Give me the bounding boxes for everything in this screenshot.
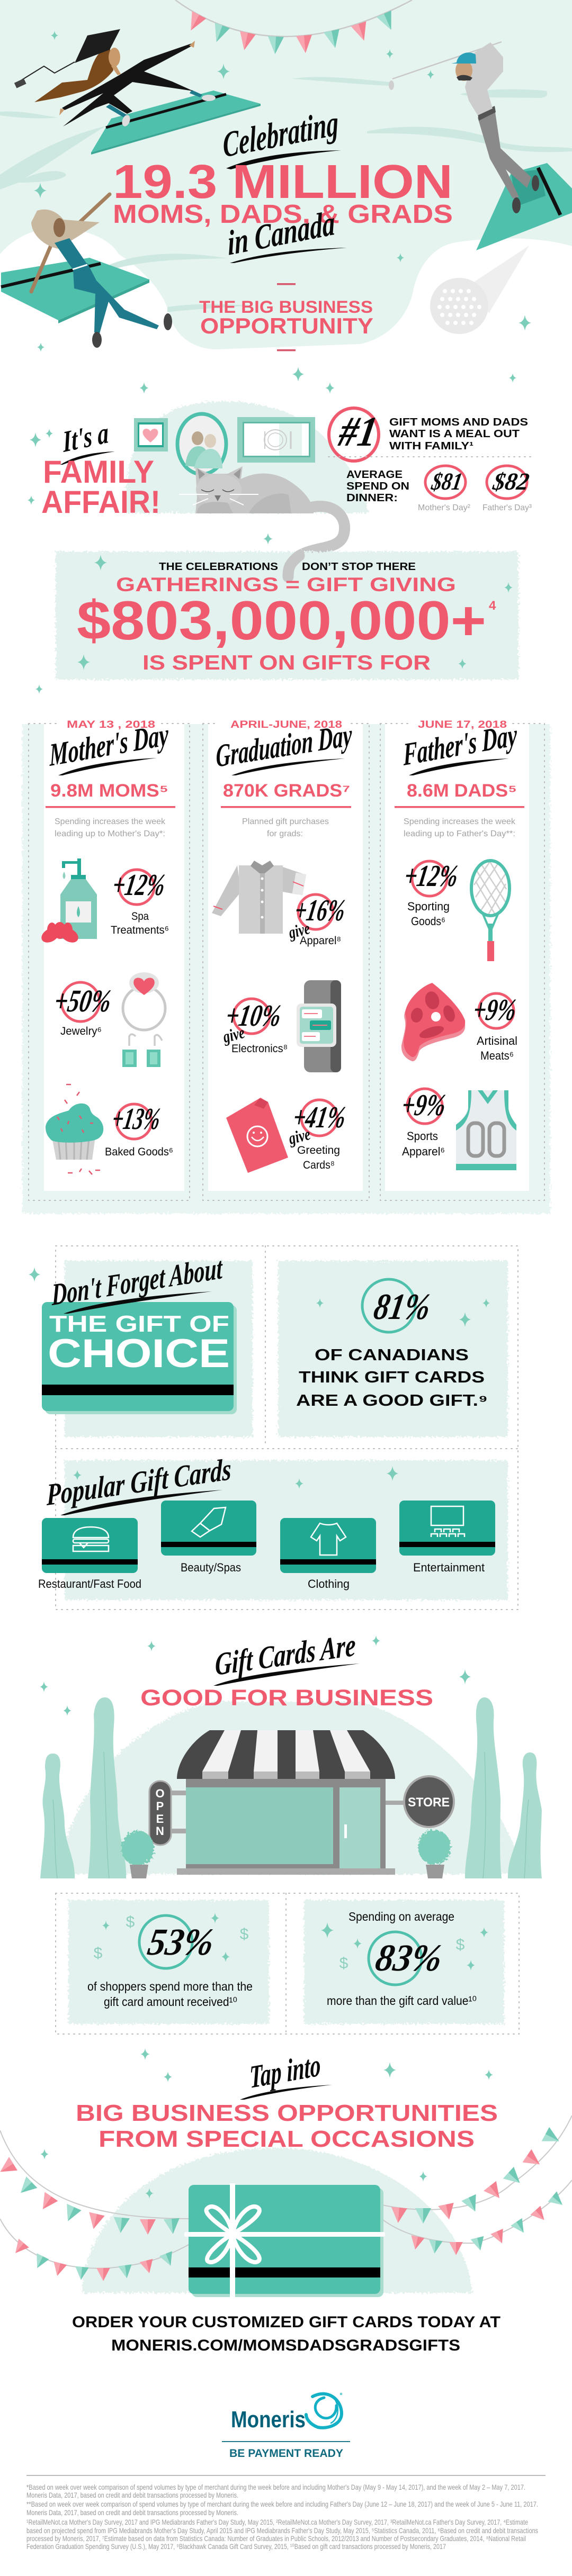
text: average spend: SPEND ON [346, 481, 409, 492]
heading: family affair: FAMILY [43, 454, 154, 490]
heading: popular gift cards [46, 1452, 231, 1515]
stat: electronics +10% [220, 998, 288, 1055]
wordmark: Moneris [231, 2407, 306, 2433]
heading: is spent: IS SPENT ON GIFTS FOR [142, 652, 431, 674]
footnotes: Moneris Data, 2017, based on credit and debit transactions processed by Moneris. [26, 2491, 238, 2499]
script title [216, 717, 352, 775]
stat: 53% [87, 1915, 253, 2009]
swirl icon [306, 2393, 342, 2428]
icon: cupcake [46, 1084, 103, 1174]
description [55, 817, 166, 838]
heading: it's a [60, 417, 115, 465]
tagline: BE PAYMENT READY [229, 2447, 343, 2460]
panel: tap into opportunities [0, 2047, 572, 2297]
stat: 83%: 83% [372, 1936, 445, 1979]
heading: don't forget about [51, 1251, 223, 1314]
card: restaurant [38, 1518, 141, 1590]
stat: greeting cards +41%: Greeting [297, 1144, 340, 1156]
heading: tap into [240, 2047, 332, 2100]
call to action: MONERIS.COM/MOMSDADSGRADSGIFTS [111, 2337, 460, 2354]
stat: sporting goods +12%: +12% [402, 858, 461, 893]
stat: sporting goods +12%: Goods⁶ [411, 915, 445, 928]
subtitle: OPPORTUNITY [200, 313, 373, 338]
store sign: STORE [408, 1795, 450, 1810]
footnotes: Moneris Data, 2017, based on credit and debit transactions processed by Moneris. [26, 2508, 238, 2517]
hero panel [0, 0, 572, 402]
store sign [386, 1776, 454, 1827]
description: Spending increases the week [55, 817, 166, 826]
stat: artisinal meats +9%: Artisinal [477, 1034, 517, 1047]
description [242, 817, 329, 838]
cat tail over panel [288, 556, 299, 577]
gift card: the gift of choice [42, 1302, 237, 1414]
stat: apparel +16%: +16% [292, 893, 348, 927]
description: leading up to Mother's Day*: [55, 829, 165, 838]
big number: $803,000,000+ [77, 590, 486, 652]
heading: gatherings: GATHERINGS = GIFT GIVING [116, 574, 456, 595]
text: average spend [346, 469, 409, 504]
callout: average spend on dinner [346, 466, 532, 512]
subtitle [199, 283, 373, 351]
stat: spa +12%: +12% [110, 867, 168, 902]
description: Planned gift purchases [242, 817, 329, 826]
badge: #1: #1 [335, 409, 381, 455]
potted shrubs [121, 1830, 451, 1878]
heading: celebrating [222, 102, 341, 169]
golfer on gift card [389, 42, 572, 250]
stat: artisinal meats +9% [471, 992, 519, 1062]
heading: gift cards are: Gift Cards Are [215, 1627, 355, 1683]
stat: sports apparel +9% [399, 1088, 449, 1158]
script title: Graduation Day [216, 717, 352, 774]
icon: jewelry [122, 972, 165, 1067]
stat: greeting cards +41%: give [286, 1124, 312, 1148]
picture frame: heart [134, 418, 168, 451]
column: father's day [395, 717, 524, 1170]
text: gift moms and dads want: WANT IS A MEAL OUT [389, 428, 520, 440]
badge: $82 [482, 466, 532, 512]
icon: smart watch [297, 980, 341, 1072]
stars section two [28, 382, 335, 694]
text: gift moms and dads want: WITH FAMILY¹ [389, 440, 473, 452]
open sign: E [156, 1812, 164, 1825]
footnotes: Federation Graduation Spending Survey (U.S.), May 2017, ⁹Blackhawk Canada Gift Card Survey, 2015, ¹⁰Based on gift card transactions processed by Moneris, 2017 [26, 2542, 446, 2551]
column: graduation day [212, 717, 352, 1173]
date: JUNE 17, 2018 [418, 719, 507, 730]
heading: don't forget about: Don't Forget About [51, 1251, 223, 1312]
stat: greeting cards +41%: +41% [291, 1100, 348, 1134]
card: entertainment: Entertainment [413, 1561, 485, 1574]
mint hill [58, 1702, 524, 1874]
stat: baked goods +13%: Baked Goods⁶ [105, 1146, 173, 1158]
call to action: ORDER YOUR CUSTOMIZED GIFT CARDS TODAY AT [72, 2313, 501, 2331]
mint backgrounds [65, 1261, 508, 1600]
heading: family affair [41, 454, 160, 520]
stat: apparel +16% [286, 893, 348, 947]
description: leading up to Father's Day**: [404, 829, 515, 838]
date: MAY 13 , 2018 [67, 719, 155, 730]
cat [179, 466, 345, 577]
text: gift moms and dads want [389, 417, 528, 452]
text: the celebrations: THE CELEBRATIONS [159, 561, 278, 573]
stat: greeting cards +41%: Cards⁸ [303, 1159, 335, 1171]
mint band [22, 717, 550, 1214]
column: mother's day [39, 717, 175, 1174]
heading: good for business: GOOD FOR BUSINESS [140, 1685, 433, 1711]
stat: apparel +16%: give [286, 918, 312, 942]
mint hill [82, 2148, 472, 2293]
open sign: N [156, 1824, 164, 1838]
icon: spa bottle [39, 858, 97, 945]
wind swooshes [0, 77, 572, 312]
stars [40, 2048, 493, 2199]
card: beauty: Beauty/Spas [181, 1561, 241, 1574]
card: beauty [161, 1501, 256, 1574]
panel: gift spending total [56, 552, 519, 680]
stat: sporting goods +12%: Sporting [407, 900, 450, 913]
stars [77, 555, 513, 670]
stat: 83% [327, 1910, 477, 2008]
open sign: O [155, 1787, 165, 1800]
bunting top [175, 0, 412, 55]
heading: celebrating: Celebrating [222, 102, 339, 165]
call to action [72, 2313, 501, 2354]
stat: apparel +16%: Apparel⁸ [300, 935, 341, 947]
card: clothing [280, 1518, 376, 1590]
bunting: bottom left and right [0, 2116, 572, 2281]
icon: steak [401, 983, 465, 1061]
badge: $82: Father's Day³ [482, 503, 532, 512]
logo: moneris [222, 2393, 350, 2460]
stats box: $ [94, 1945, 103, 1962]
heading: big business opportunities [76, 2100, 498, 2152]
woman on gift card [1, 194, 172, 348]
stars and dollars [102, 1913, 488, 1971]
badge: $81: Mother's Day² [418, 503, 471, 512]
script title: Mother's Day [48, 717, 169, 773]
mint panel background [56, 552, 519, 680]
stats box: $ [339, 1955, 348, 1972]
heading: it's a: It's a [61, 417, 110, 459]
heading: popular gift cards: Popular Gift Cards [46, 1452, 231, 1512]
stat: 53%: 53% [145, 1920, 217, 1963]
stat: spa +12%: Spa [131, 910, 149, 923]
heading: tap into: Tap into [249, 2047, 321, 2095]
title: 19.3 million: 19.3 MILLION [113, 156, 453, 209]
stat: spa +12% [110, 867, 169, 936]
text: canadians think: OF CANADIANS [315, 1345, 469, 1364]
oval portrait [177, 414, 226, 474]
text: canadians think [296, 1345, 488, 1409]
stat: 9.8M MOMS⁵ [50, 781, 168, 801]
stat: 870K GRADS⁷ [223, 781, 350, 801]
panel: three occasions [0, 699, 572, 1214]
stat: baked goods +13% [105, 1101, 173, 1158]
description: Spending increases the week [404, 817, 516, 826]
stats box: $ [240, 1926, 249, 1943]
hero mint background [0, 0, 572, 370]
stat: 8.6M DADS⁵ [407, 781, 517, 801]
stat: artisinal meats +9%: Meats⁶ [480, 1049, 514, 1062]
stat: jewelry +50%: +50% [52, 983, 114, 1019]
text: the celebrations [159, 561, 416, 573]
golf ball [430, 246, 529, 334]
heading: gift cards are [213, 1627, 360, 1686]
icon: greeting card [226, 1098, 288, 1173]
text: average spend: AVERAGE [346, 469, 403, 481]
plants [40, 1697, 542, 1878]
mint wall [125, 401, 369, 513]
panel: gift of choice [29, 1246, 518, 1610]
awning [177, 1730, 395, 1779]
stat: 83%: more than the gift card value¹⁰ [327, 1994, 477, 2008]
description: for grads: [267, 829, 303, 838]
callout: number one gift [329, 408, 528, 461]
stat: jewelry +50% [52, 982, 114, 1037]
stat: greeting cards +41% [286, 1100, 348, 1171]
script title [48, 717, 169, 775]
icon: jersey [456, 1090, 516, 1170]
panel: good for business [40, 1627, 542, 2034]
gift card: the gift of choice: THE GIFT OF [49, 1311, 229, 1337]
stars [29, 1267, 490, 1489]
stat: 53%: gift card amount received¹⁰ [104, 1995, 237, 2009]
stat: 81% [362, 1279, 434, 1332]
storefront [121, 1730, 454, 1878]
stat: baked goods +13%: +13% [110, 1101, 163, 1136]
open sign [149, 1781, 186, 1845]
white columns [0, 699, 572, 1191]
stat: electronics +10%: +10% [224, 998, 284, 1033]
stat: electronics +10%: Electronics⁸ [231, 1043, 288, 1055]
stats box: $ [126, 1913, 135, 1931]
badge: $81: $81 [429, 468, 464, 495]
dotted frames [29, 724, 544, 1200]
gift card: the gift of choice: CHOICE [48, 1331, 230, 1376]
stars hero [34, 31, 531, 383]
script title [402, 717, 517, 775]
white clouds [0, 228, 572, 402]
graduate on gift card [14, 29, 261, 155]
stat: 81%: 81% [371, 1286, 434, 1327]
stat: sports apparel +9%: +9% [399, 1088, 449, 1122]
badge: $82: $82 [490, 468, 531, 495]
badge: $81 [418, 466, 471, 512]
text: average spend: DINNER: [346, 492, 398, 504]
panel: family affair wall [41, 401, 369, 577]
big number: 4 [489, 599, 496, 613]
heading: family affair: AFFAIR! [41, 484, 160, 520]
heading: big business opportunities: BIG BUSINESS OPPORTUNITIES [76, 2100, 498, 2126]
heading: in canada: in Canada [227, 203, 336, 263]
stars [40, 1635, 471, 1716]
card: entertainment [399, 1501, 495, 1574]
description [404, 817, 516, 838]
title: moms dads grads: MOMS, DADS, & GRADS [113, 200, 453, 229]
text: canadians think: ARE A GOOD GIFT.⁹ [296, 1391, 488, 1409]
date: APRIL-JUNE, 2018 [230, 719, 342, 730]
stat: sporting goods +12% [402, 858, 461, 928]
stat: 53%: of shoppers spend more than the [87, 1980, 253, 1993]
card: restaurant: Restaurant/Fast Food [38, 1577, 141, 1590]
open sign: P [156, 1800, 164, 1813]
subtitle: THE BIG BUSINESS [199, 297, 373, 317]
stat: jewelry +50%: Jewelry⁶ [60, 1025, 102, 1037]
stat: spa +12%: Treatments⁶ [111, 924, 169, 936]
icon: racket [471, 861, 510, 961]
footnotes [26, 2475, 546, 2551]
stat: sports apparel +9%: Sports [407, 1129, 438, 1143]
text: the celebrations: DON’T STOP THERE [302, 561, 416, 573]
stat: sports apparel +9%: Apparel⁶ [402, 1145, 445, 1158]
stats box [56, 1893, 519, 2034]
heading: big business opportunities: FROM SPECIAL OCCASIONS [99, 2126, 475, 2152]
gift card with bow [184, 2183, 385, 2297]
icon: shirt [212, 861, 306, 934]
picture frame: plate [237, 417, 315, 463]
card: clothing: Clothing [308, 1577, 350, 1590]
script title: Father's Day [402, 717, 517, 773]
stat: artisinal meats +9%: +9% [471, 992, 519, 1027]
stat: electronics +10%: give [220, 1023, 246, 1046]
stat: 83%: Spending on average [348, 1910, 454, 1923]
text: gift moms and dads want: GIFT MOMS AND DADS [389, 417, 528, 428]
text: canadians think: THINK GIFT CARDS [299, 1368, 485, 1386]
stats box: $ [456, 1936, 465, 1954]
